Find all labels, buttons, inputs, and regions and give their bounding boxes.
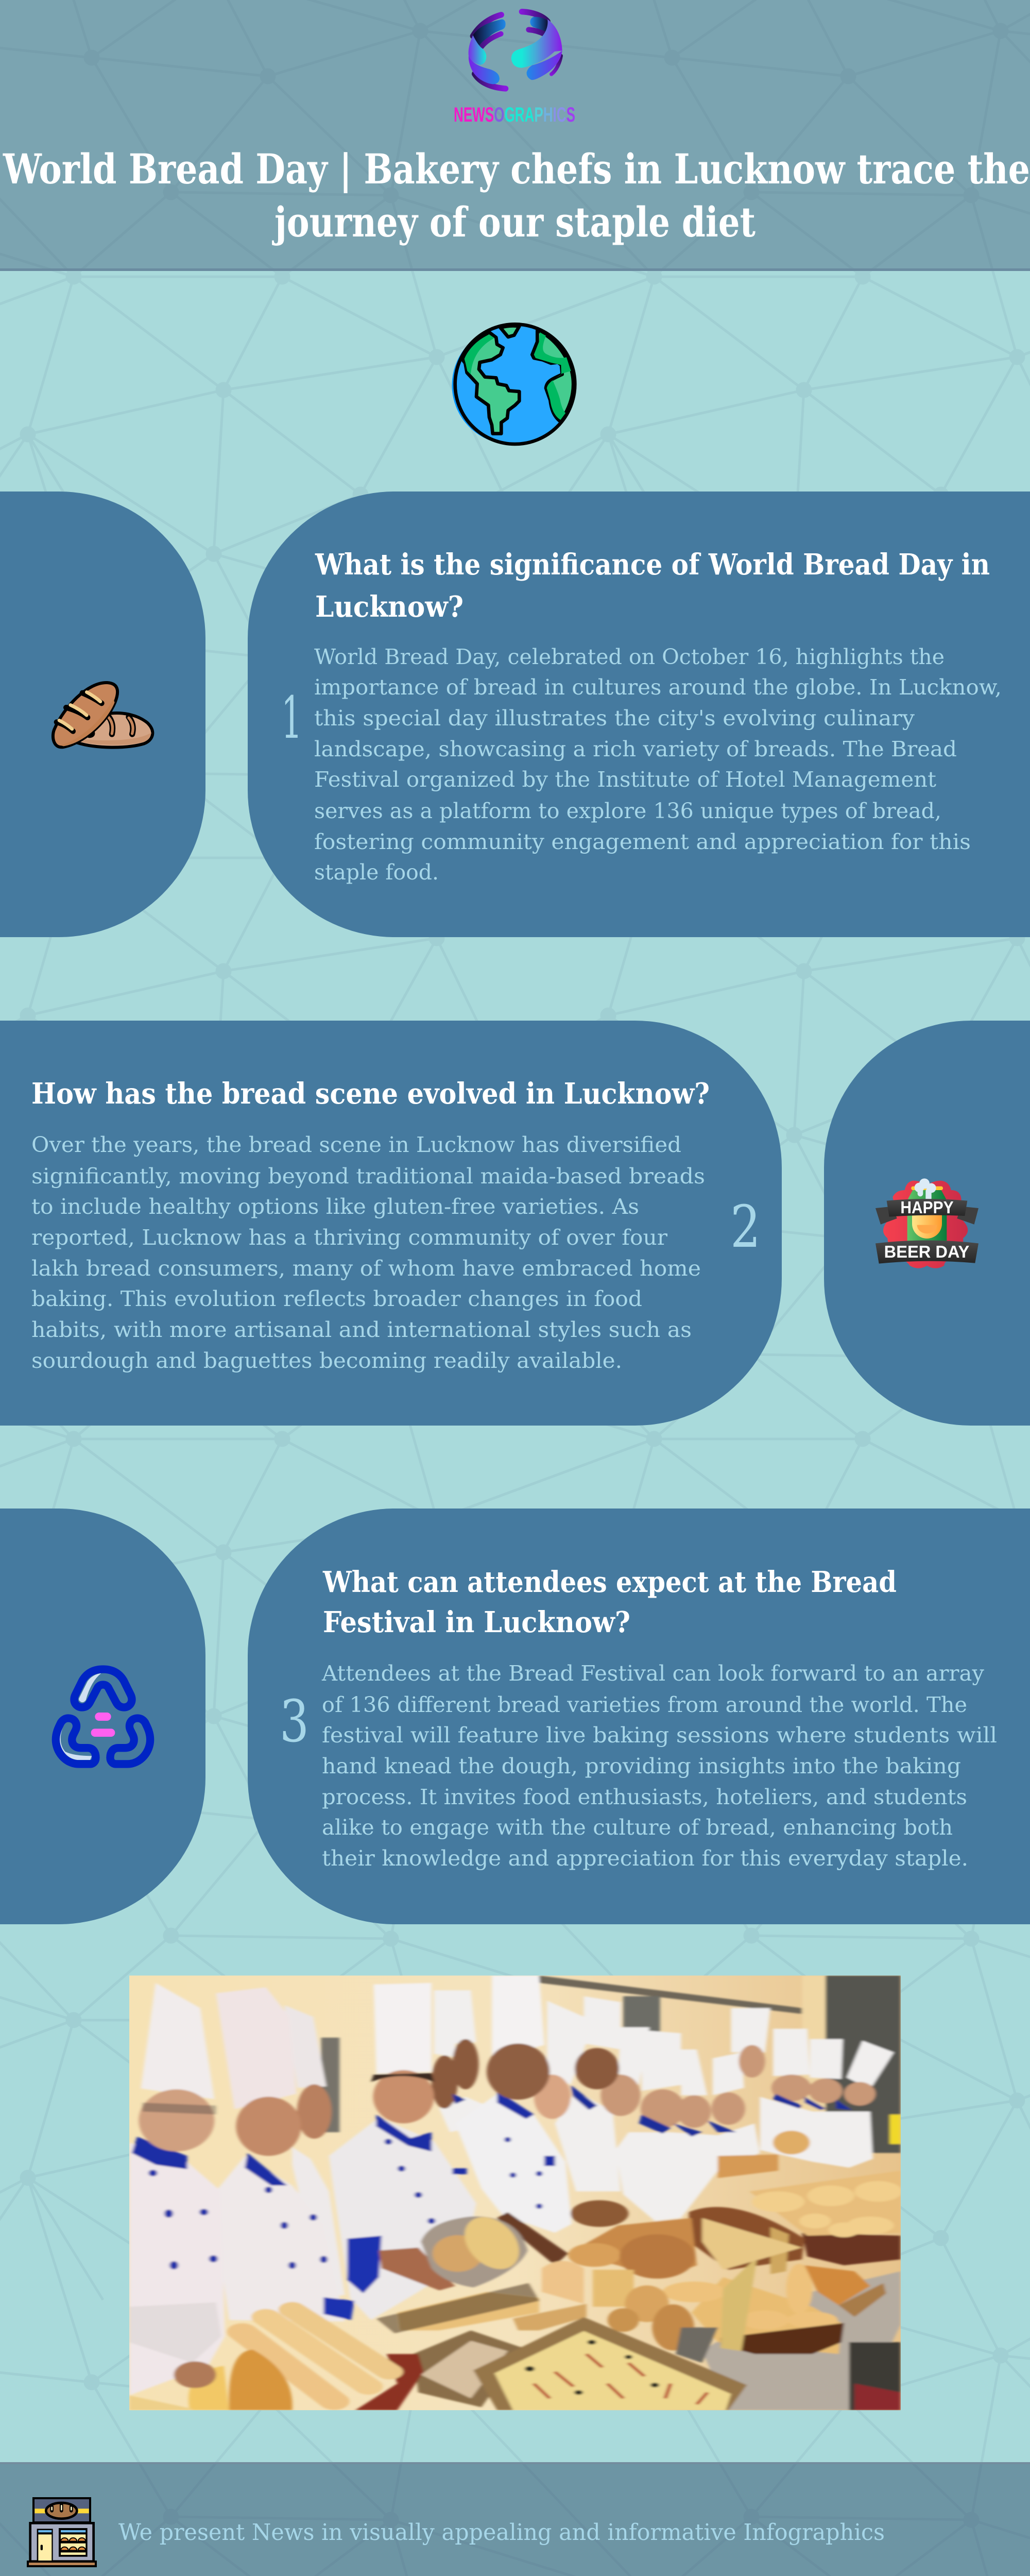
icon: bread: [53, 683, 152, 748]
heading 3: Festival in Lucknow?: [323, 1605, 630, 1639]
body text 3: festival will feature live baking sessions where students will: [322, 1723, 997, 1748]
body text 1: serves as a platform to explore 136 unique types of bread,: [314, 799, 941, 823]
footer band: [0, 2462, 1030, 2576]
body text 3: their knowledge and appreciation for this everyday staple.: [322, 1846, 968, 1871]
body text 2: sourdough and baguettes becoming readily available.: [31, 1348, 622, 1373]
body text 3: hand knead the dough, providing insights into the baking: [322, 1754, 961, 1778]
title: [3, 145, 1030, 246]
panel 1: question: [248, 492, 1030, 937]
icon: three-part dough symbol: [56, 1669, 150, 1764]
photo: bakery chefs with breads: [129, 1975, 902, 2410]
footer tagline: We present News in visually appealing and informative Infographics: [118, 2519, 885, 2546]
body text 2: [31, 1132, 705, 1373]
number 1: 1: [281, 685, 302, 752]
panel 1: icon tab: [0, 492, 205, 937]
body text 2: Over the years, the bread scene in Lucknow has diversified: [31, 1132, 681, 1157]
panel 3: icon tab: [0, 1509, 205, 1924]
body text 3: alike to engage with the culture of bread, enhancing both: [322, 1815, 953, 1840]
heading 1: [315, 548, 990, 624]
body text 1: this special day illustrates the city's evolving culinary: [314, 706, 915, 731]
body text 2: to include healthy options like gluten-free varieties. As: [31, 1194, 639, 1219]
body text 3: [321, 1661, 997, 1871]
body text 2: habits, with more artisanal and international styles such as: [31, 1317, 692, 1342]
body text 1: landscape, showcasing a rich variety of breads. The Bread: [314, 737, 957, 761]
body text 2: significantly, moving beyond traditional maida-based breads: [31, 1164, 705, 1189]
body text 3: Attendees at the Bread Festival can look forward to an array: [321, 1661, 985, 1686]
heading 3: What can attendees expect at the Bread: [322, 1565, 897, 1599]
body text 3: process. It invites food enthusiasts, hoteliers, and students: [322, 1785, 967, 1809]
body text 1: staple food.: [314, 860, 439, 885]
header band: [0, 0, 1030, 271]
icon: happy beer day badge: BEER DAY: [884, 1243, 969, 1262]
body text 1: importance of bread in cultures around the globe. In Lucknow,: [314, 675, 1002, 700]
body text 3: of 136 different bread varieties from around the world. The: [322, 1692, 967, 1717]
panel 2: question: [0, 1021, 782, 1426]
number 2: 2: [730, 1194, 761, 1261]
heading 3: [322, 1565, 897, 1639]
body text 1: fostering community engagement and appreciation for this: [314, 829, 971, 854]
number 3: 3: [280, 1688, 309, 1755]
body text 2: lakh bread consumers, many of whom have embraced home: [31, 1256, 701, 1281]
body text 1: [314, 645, 1002, 885]
panel 2: icon tab: [824, 1021, 1030, 1426]
heading 2: How has the bread scene evolved in Lucknow?: [31, 1077, 710, 1111]
logo mark: [469, 12, 562, 89]
icon: happy beer day badge: [876, 1178, 978, 1268]
logo wordmark: NEWSOGRAPHICS: [454, 104, 575, 126]
icon: bakery shop: [28, 2498, 96, 2566]
body text 1: World Bread Day, celebrated on October 16, highlights the: [314, 645, 945, 669]
logo: Newsographics: [454, 12, 575, 126]
panel 3: question: [248, 1509, 1030, 1924]
icon: happy beer day badge: HAPPY: [900, 1198, 954, 1217]
icon: globe: [452, 324, 575, 445]
heading 1: Lucknow?: [315, 590, 464, 624]
title: journey of our staple diet: [272, 198, 756, 246]
body text 1: Festival organized by the Institute of Hotel Management: [314, 767, 937, 792]
body text 2: baking. This evolution reflects broader changes in food: [31, 1286, 642, 1311]
body text 2: reported, Lucknow has a thriving community of over four: [31, 1225, 667, 1250]
